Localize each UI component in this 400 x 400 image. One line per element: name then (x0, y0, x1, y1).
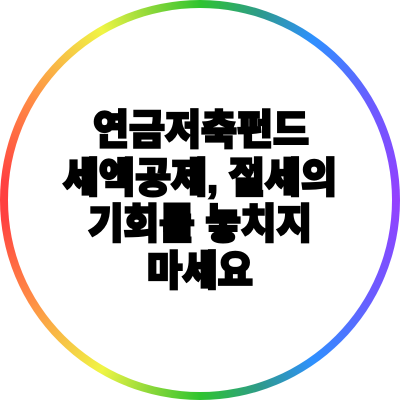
title: 기회를 놓치지 (88, 201, 312, 247)
title: 연금저축펀드 (93, 107, 309, 153)
title: 마세요 (147, 248, 253, 294)
title: 세액공제, 절세의 (63, 155, 337, 201)
title (62, 107, 337, 294)
